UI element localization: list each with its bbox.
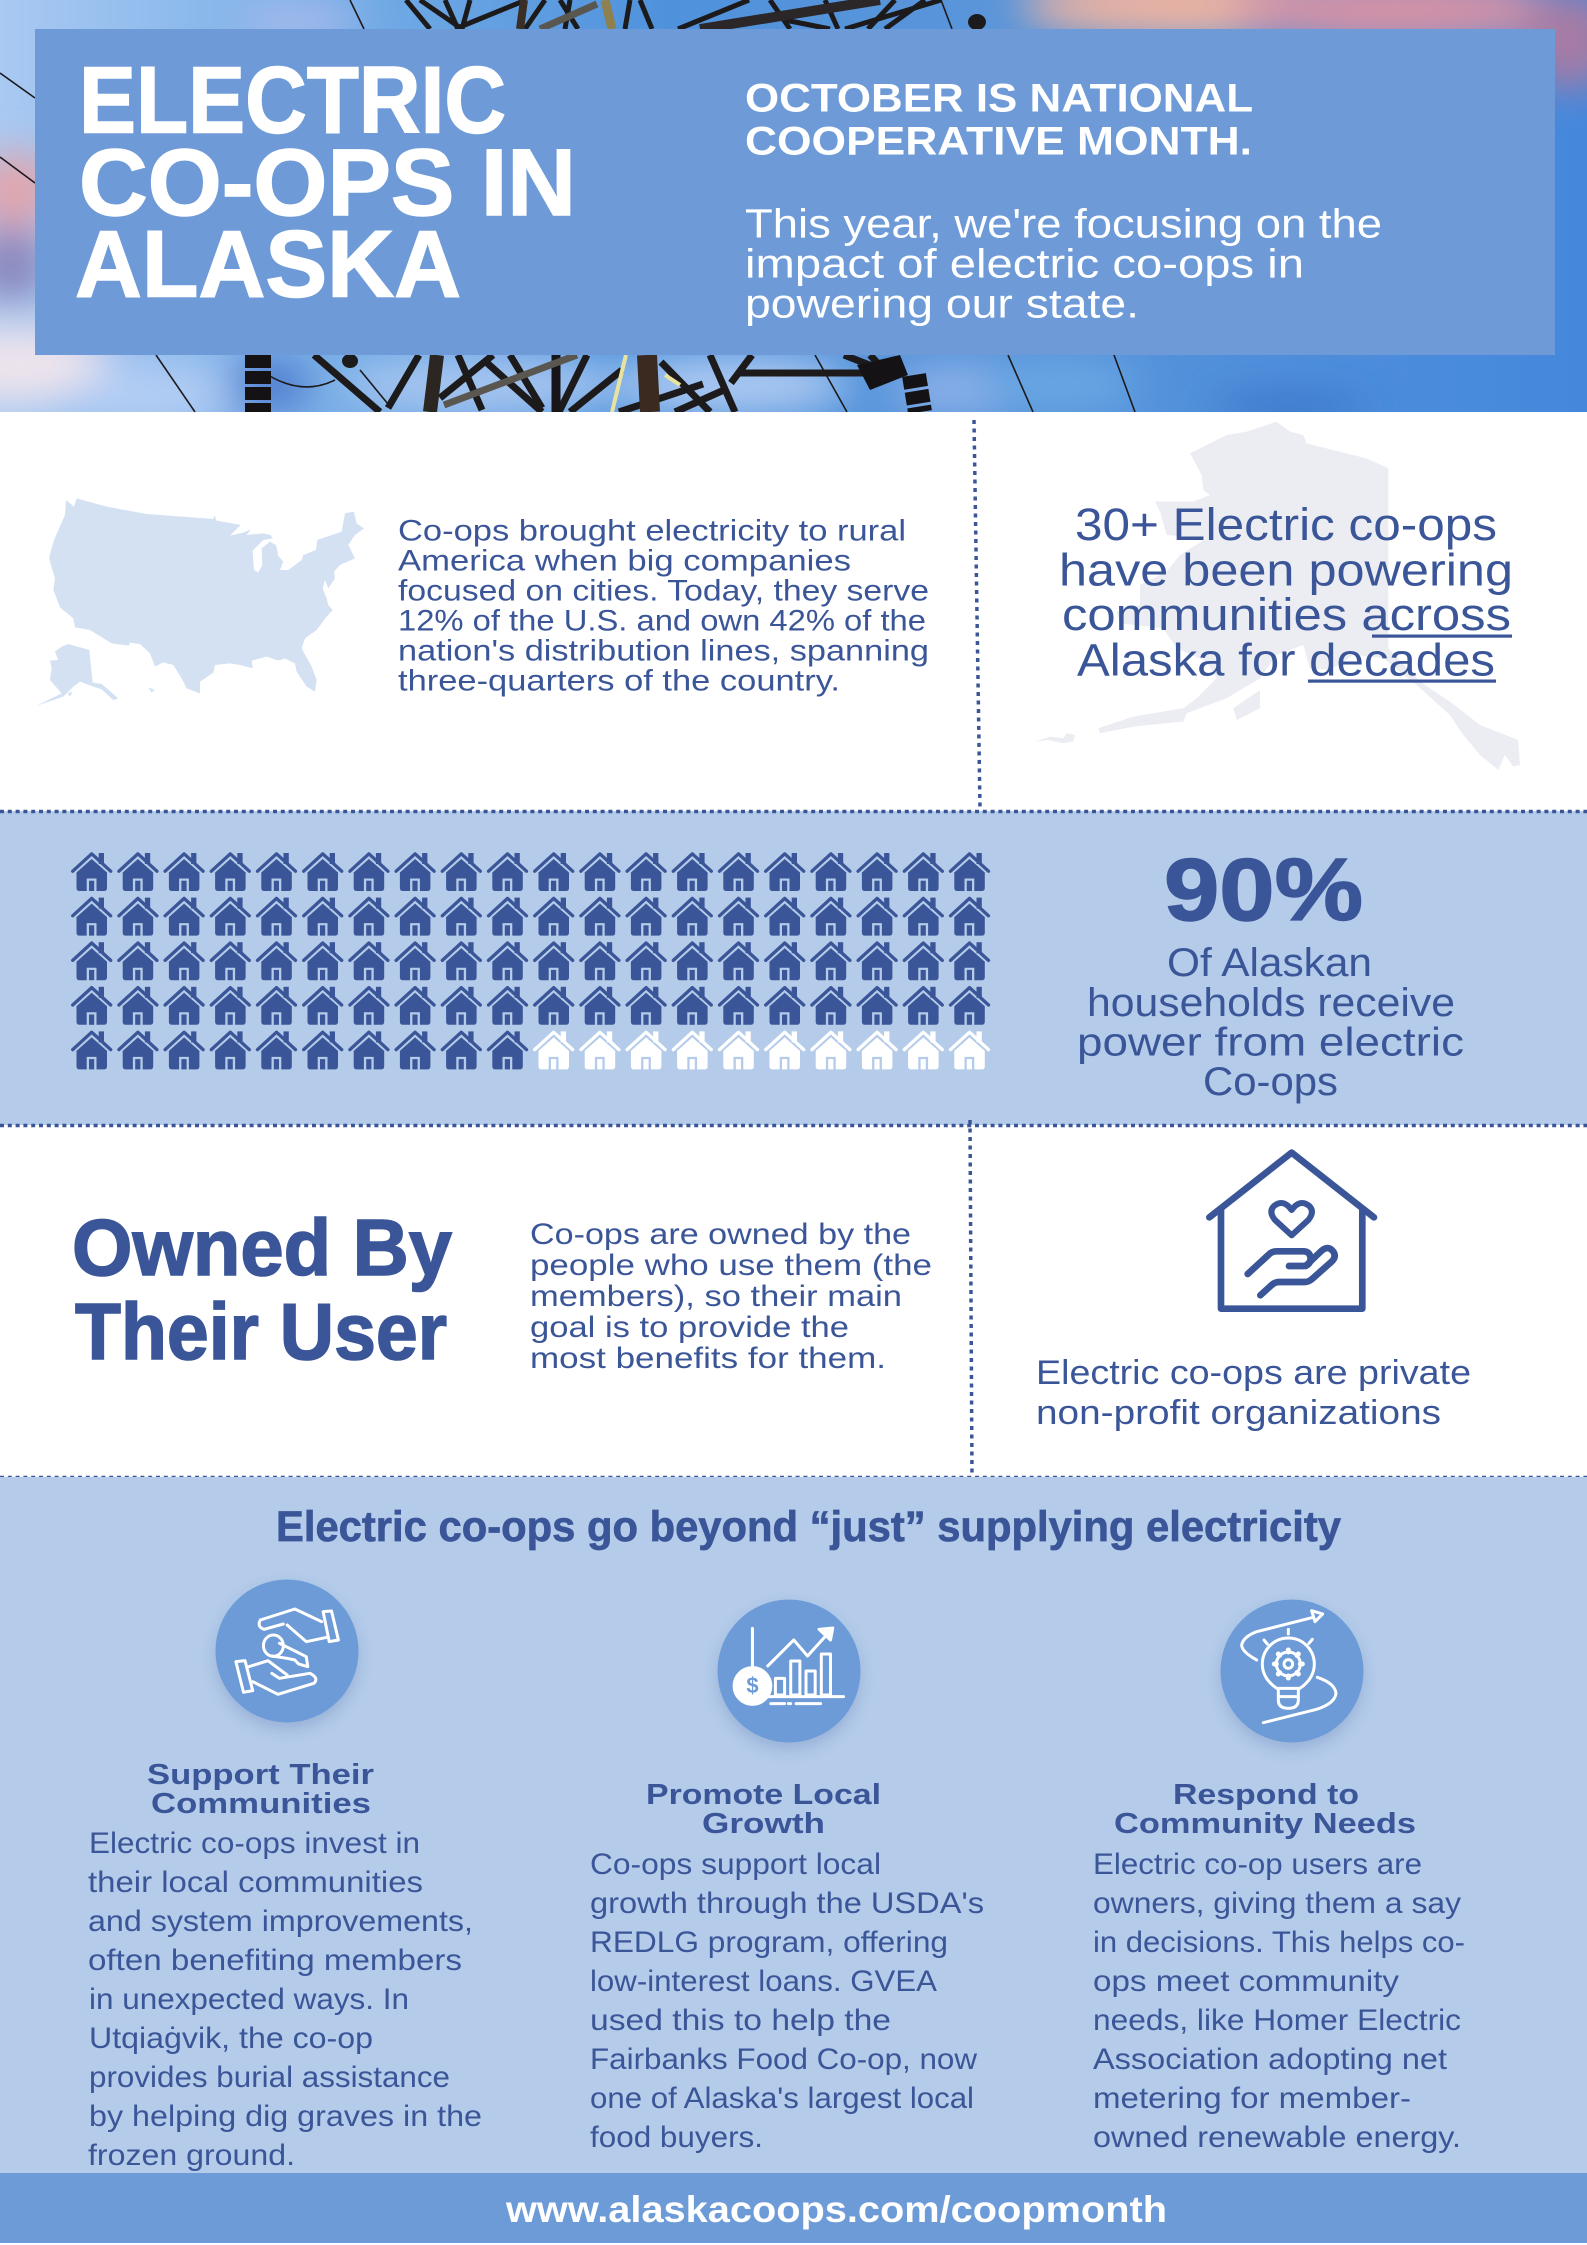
hero title box <box>35 29 1555 355</box>
column title: Growth <box>702 1808 825 1840</box>
column title: Communities <box>151 1788 371 1820</box>
column title: Community Needs <box>1114 1808 1416 1840</box>
stat caption: households receive <box>1087 981 1455 1025</box>
text: 30+ electric co-ops: 30+ Electric co-ops <box>1075 499 1497 550</box>
text: co-op history: Co-ops brought electricity to rural <box>398 515 906 548</box>
column: respond to community needs <box>1093 1600 1465 2154</box>
panel: 30+ electric co-ops <box>1035 422 1520 770</box>
panel: owned by their user <box>72 1203 932 1376</box>
text: co-op history: nation's distribution lines, spanning <box>398 635 929 668</box>
icon: light bulb with gear and path <box>1220 1600 1364 1742</box>
column title <box>1114 1779 1416 1840</box>
panel: non-profit <box>1036 1153 1471 1432</box>
text: ownership: most benefits for them. <box>530 1342 886 1375</box>
column text: metering for member- <box>1093 2082 1411 2115</box>
subheading: October is national cooperative month <box>745 77 1253 164</box>
column text: low-interest loans. GVEA <box>590 1965 937 1998</box>
text: private non-profit: Electric co-ops are private <box>1036 1354 1471 1392</box>
column text: ops meet community <box>1093 1965 1399 1998</box>
column title <box>147 1759 374 1820</box>
column text: in unexpected ways. In <box>89 1983 409 2016</box>
title: ALASKA <box>75 212 461 318</box>
hero photo: transmission tower against sky <box>0 0 1587 425</box>
icon: house with heart and hand <box>1209 1153 1374 1309</box>
text: co-op history: America when big companies <box>398 545 851 578</box>
column text: REDLG program, offering <box>590 1926 948 1959</box>
column text: Co-ops support local <box>590 1848 881 1881</box>
text: 30+ electric co-ops: have been powering <box>1059 544 1513 596</box>
subheading: October is national cooperative month: COOPERATIVE MONTH. <box>745 120 1252 164</box>
column text: provides burial assistance <box>89 2061 450 2094</box>
column text: and system improvements, <box>88 1905 473 1938</box>
panel: co-op history <box>36 498 929 706</box>
column title: Promote Local <box>646 1779 881 1811</box>
text: co-op history: three-quarters of the country. <box>398 665 840 698</box>
panel: 90 percent band <box>0 811 1587 1125</box>
column text: frozen ground. <box>88 2139 295 2172</box>
column title: Support Their <box>147 1759 374 1791</box>
text: private non-profit: non-profit organizations <box>1036 1394 1441 1432</box>
column text: often benefiting members <box>88 1944 462 1977</box>
text: co-op history: 12% of the U.S. and own 42% of the <box>398 605 926 638</box>
chart: household pictogram, 90 of 100 <box>73 853 988 1069</box>
stat caption: Co-ops <box>1203 1060 1338 1104</box>
column text: one of Alaska's largest local <box>590 2082 974 2115</box>
icon: dollar and growth chart: $ <box>746 1673 759 1698</box>
column text: Fairbanks Food Co-op, now <box>590 2043 978 2076</box>
text: ownership <box>530 1218 932 1375</box>
subheading: October is national cooperative month: OCTOBER IS NATIONAL <box>745 77 1253 121</box>
column text <box>88 1827 482 2172</box>
footer link: www.alaskacoops.com/coopmonth <box>505 2189 1167 2230</box>
text: 30+ electric co-ops <box>1059 499 1513 686</box>
text: ownership: goal is to provide the <box>530 1311 849 1344</box>
column text <box>590 1848 984 2154</box>
intro text: This year, we're focusing on the <box>745 200 1382 246</box>
text: ownership: people who use them (the <box>530 1249 932 1282</box>
text: 30+ electric co-ops: communities across <box>1062 589 1511 640</box>
intro text: powering our state. <box>745 280 1139 326</box>
column text: used this to help the <box>590 2004 891 2037</box>
divider horizontal dotted lines <box>0 812 1587 1478</box>
panel: beyond electricity <box>0 1477 1587 2173</box>
column title <box>646 1779 881 1840</box>
divider vertical 1 <box>974 420 980 809</box>
heading: owned by their user: Their User <box>75 1287 447 1376</box>
icon: hands with key <box>216 1580 358 1722</box>
title: CO-OPS IN <box>79 130 576 236</box>
heading: owned by their user: Owned By <box>72 1203 452 1292</box>
text: co-op history <box>398 515 929 698</box>
column text: owned renewable energy. <box>1093 2121 1461 2154</box>
column text: their local communities <box>88 1866 423 1899</box>
column: promote local growth <box>590 1600 984 2154</box>
text: ownership: members), so their main <box>530 1280 902 1313</box>
intro text: impact of electric co-ops in <box>745 240 1304 286</box>
column text: food buyers. <box>590 2121 763 2154</box>
stat caption: Of Alaskan <box>1167 941 1372 985</box>
column text: Electric co-op users are <box>1093 1848 1422 1881</box>
column text <box>1093 1848 1465 2154</box>
title <box>75 48 576 318</box>
stat caption <box>1077 941 1464 1104</box>
divider vertical 2 <box>970 1120 972 1476</box>
text: co-op history: focused on cities. Today, they serve <box>398 575 929 608</box>
column text: Electric co-ops invest in <box>89 1827 420 1860</box>
title: ELECTRIC <box>79 48 506 154</box>
column text: growth through the USDA's <box>590 1887 984 1920</box>
text: private non-profit <box>1036 1354 1471 1432</box>
column text: in decisions. This helps co- <box>1093 1926 1465 1959</box>
column text: by helping dig graves in the <box>89 2100 482 2133</box>
text: 30+ electric co-ops: Alaska for decades <box>1077 635 1495 686</box>
icon: Alaska map <box>1035 422 1520 770</box>
text: ownership: Co-ops are owned by the <box>530 1218 911 1251</box>
column text: Association adopting net <box>1093 2043 1447 2076</box>
intro text <box>745 200 1382 326</box>
column title: Respond to <box>1173 1779 1359 1811</box>
heading: beyond electricity: Electric co-ops go beyond “just” supplying electricity <box>276 1503 1341 1551</box>
column: support their communities <box>88 1580 482 2172</box>
column text: owners, giving them a say <box>1093 1887 1461 1920</box>
footer <box>0 2173 1587 2243</box>
icon: dollar and growth chart <box>718 1600 860 1742</box>
stat caption: power from electric <box>1077 1020 1464 1064</box>
stat: 90%: 90% <box>1164 840 1363 939</box>
column text: needs, like Homer Electric <box>1093 2004 1461 2037</box>
heading: owned by their user <box>72 1203 452 1376</box>
icon: United States map <box>36 498 364 706</box>
column text: Utqiaġvik, the co-op <box>89 2022 373 2055</box>
